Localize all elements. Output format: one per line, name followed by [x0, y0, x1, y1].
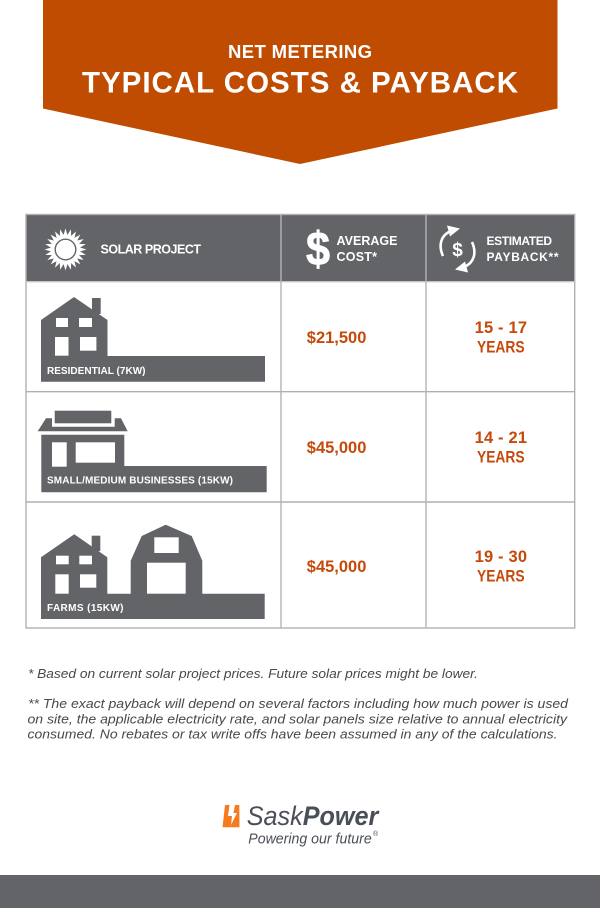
value: business payback: 14 - 21	[475, 429, 527, 447]
value: farm payback	[475, 548, 527, 586]
value: residential payback: YEARS	[477, 339, 525, 357]
heading: estimated payback: ESTIMATED	[486, 234, 552, 248]
heading: average cost	[336, 234, 398, 264]
row: farms	[41, 525, 527, 619]
label: small and medium businesses: SMALL/MEDIUM BUSINESSES (15KW)	[47, 476, 233, 486]
value: business payback: YEARS	[477, 448, 525, 466]
value: farm cost: $45,000	[307, 557, 366, 576]
title: typical costs and payback: TYPICAL COSTS & PAYBACK	[82, 66, 519, 100]
heading: estimated payback: PAYBACK**	[486, 250, 559, 264]
icon: farmhouse and barn	[41, 525, 265, 619]
table header row	[26, 214, 575, 282]
value: residential payback: 15 - 17	[475, 319, 527, 337]
label: residential: RESIDENTIAL (7KW)	[47, 366, 146, 377]
footnote: payback: ** The exact payback will depend on several factors including how much power is used	[28, 696, 569, 711]
footnote: payback: on site, the applicable electricity rate, and solar panels size relative to annual electricity	[28, 712, 569, 726]
heading: solar project: SOLAR PROJECT	[100, 242, 201, 256]
logo tagline: Powering our future	[248, 831, 372, 847]
value: business cost: $45,000	[307, 438, 366, 457]
banner: title	[43, 0, 558, 164]
footer bar	[0, 875, 600, 908]
table: costs and payback	[26, 214, 575, 628]
value: business payback	[475, 429, 527, 466]
footnotes	[28, 666, 569, 742]
icon: sun	[44, 228, 87, 271]
row: residential	[41, 297, 527, 382]
logo: SaskPower	[222, 801, 380, 847]
footnote: payback: consumed. No rebates or tax write offs have been assumed in any of the calculations.	[28, 726, 558, 742]
icon: dollar sign: $	[306, 222, 330, 275]
value: residential payback	[475, 319, 527, 357]
label: farms: FARMS (15KW)	[47, 603, 124, 614]
icon: payback cycle	[441, 226, 474, 272]
subtitle: net metering: NET METERING	[228, 41, 372, 62]
heading: average cost: AVERAGE	[336, 234, 398, 248]
value: residential cost: $21,500	[307, 328, 366, 347]
footnote: payback	[28, 696, 569, 742]
value: farm payback: 19 - 30	[475, 548, 527, 566]
heading: average cost: COST*	[336, 250, 377, 264]
icon: house	[41, 297, 265, 382]
registered mark: ®	[373, 830, 379, 838]
icon: business building	[38, 411, 267, 492]
row: small and medium businesses	[38, 411, 527, 492]
logo wordmark: SaskPower	[247, 801, 380, 831]
icon: payback cycle: $	[452, 240, 463, 261]
table grid lines	[26, 214, 575, 628]
footnote: cost: * Based on current solar project prices. Future solar prices might be lower.	[28, 666, 478, 681]
heading: estimated payback	[486, 234, 559, 264]
value: farm payback: YEARS	[477, 568, 525, 586]
icon: logo mark	[222, 805, 240, 827]
